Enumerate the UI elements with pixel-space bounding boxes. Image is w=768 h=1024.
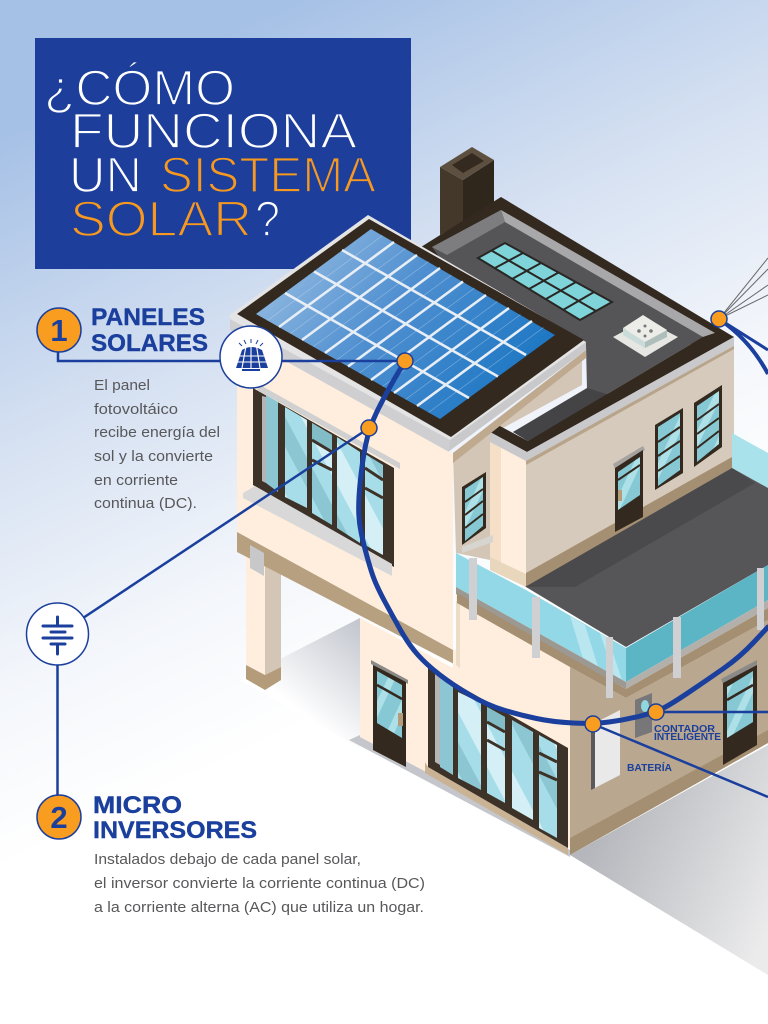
lower left door xyxy=(371,660,408,767)
column xyxy=(246,540,281,690)
heading: micro inversores: MICRO xyxy=(93,792,182,819)
connection nodes xyxy=(361,311,727,732)
number badge 2: 2 xyxy=(50,800,68,835)
upper window awning xyxy=(257,385,400,469)
label: smart meter: CONTADOR xyxy=(654,724,716,735)
upper facade xyxy=(237,334,453,650)
connector lines xyxy=(58,319,768,800)
service wires xyxy=(719,258,768,319)
number badge 2 xyxy=(37,795,81,839)
text: paneles solares description xyxy=(94,377,220,512)
text: paneles solares description: El panel xyxy=(94,377,150,394)
text: paneles solares description: recibe energía del xyxy=(94,424,220,441)
smart meter xyxy=(635,693,652,738)
house illustration xyxy=(230,147,768,855)
title box xyxy=(35,38,411,269)
battery box xyxy=(591,710,620,790)
lower right door xyxy=(721,660,757,765)
upper window sill xyxy=(243,486,392,576)
title box: ? xyxy=(255,191,280,247)
text: paneles solares description: sol y la convierte xyxy=(94,448,213,465)
lower right wall xyxy=(570,620,768,855)
corner roof band and rim xyxy=(490,333,734,465)
text: paneles solares description: en corriente xyxy=(94,472,178,489)
main connection arc xyxy=(359,361,768,723)
upper large window xyxy=(253,388,394,567)
heading: micro inversores: INVERSORES xyxy=(93,817,257,844)
label: smart meter xyxy=(654,724,721,743)
label: battery: BATERÍA xyxy=(627,761,672,774)
heading: micro inversores xyxy=(93,792,257,844)
number badge 1: 1 xyxy=(50,313,68,348)
text: micro inversores description: Instalados debajo de cada panel solar, xyxy=(94,851,361,868)
overhang band xyxy=(237,532,456,665)
solar panel roof xyxy=(230,215,586,463)
upper flat roof xyxy=(421,197,734,441)
heading: paneles solares xyxy=(91,304,208,357)
terrace floor xyxy=(525,433,768,647)
title box: UN xyxy=(69,147,142,203)
skylight xyxy=(478,243,612,320)
terrace glass railing xyxy=(456,553,768,698)
number badge 1 xyxy=(37,308,81,352)
text: micro inversores description: el inversor convierte la corriente continua (DC) xyxy=(94,875,425,892)
icon: inverter battery symbol xyxy=(26,603,88,665)
label: smart meter: INTELIGENTE xyxy=(654,732,721,743)
heading: paneles solares: PANELES xyxy=(91,304,205,331)
meter box on column xyxy=(250,545,264,576)
chimney xyxy=(440,147,494,235)
lower cream wall xyxy=(360,553,570,848)
text: micro inversores description: a la corriente alterna (AC) que utiliza un hogar. xyxy=(94,899,424,916)
windows on right wall xyxy=(613,385,722,532)
text: paneles solares description: continua (DC). xyxy=(94,495,197,512)
text: micro inversores description xyxy=(94,851,425,916)
title box: FUNCIONA xyxy=(70,103,358,159)
text: paneles solares description: fotovoltáico xyxy=(94,401,178,418)
lower large window xyxy=(425,668,568,855)
title box: SOLAR xyxy=(70,191,252,247)
title box: ¿CÓMO xyxy=(44,60,235,116)
roof vent unit xyxy=(613,315,678,357)
icon: solar panel xyxy=(220,326,282,388)
ground shadows xyxy=(239,618,768,975)
right upper wall xyxy=(453,345,734,587)
title box: SISTEMA xyxy=(160,147,377,203)
small side window xyxy=(462,472,493,553)
heading: paneles solares: SOLARES xyxy=(91,330,208,357)
